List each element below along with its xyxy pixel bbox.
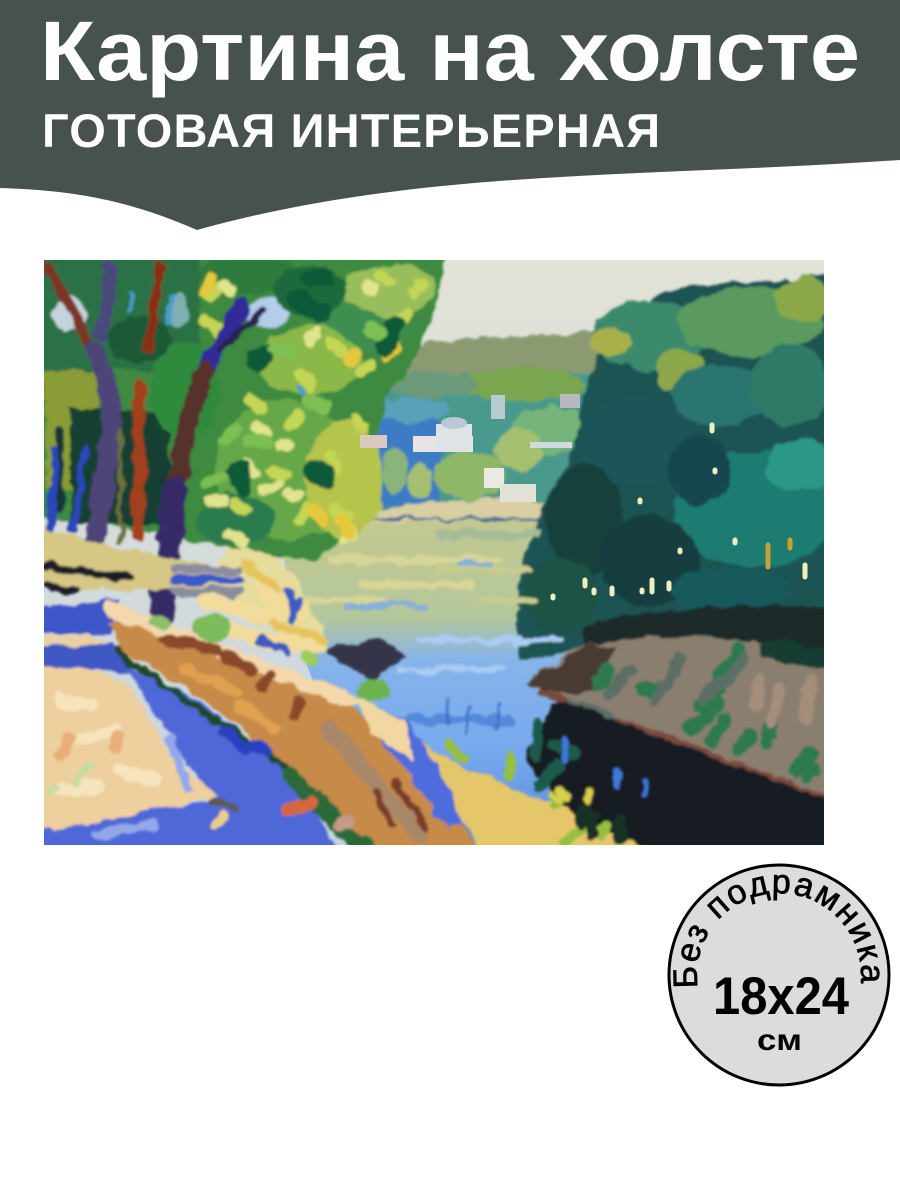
badge circle — [669, 865, 889, 1085]
title: Картина на холсте — [40, 4, 860, 98]
grass and ground above wall — [44, 526, 212, 594]
left dark woods — [20, 250, 435, 546]
bushes — [151, 614, 386, 702]
distant forest — [375, 364, 592, 512]
distant hill — [404, 328, 598, 378]
wall base green strip — [118, 652, 355, 850]
foliage dabs — [52, 275, 420, 543]
painting: river landscape — [44, 260, 824, 845]
slope above wall — [205, 565, 325, 652]
badge: canvas size — [668, 864, 890, 1086]
blue path shadow — [44, 668, 338, 845]
tree highlights — [553, 425, 805, 598]
badge curved label: Без подрамника — [673, 874, 880, 986]
dark shore — [325, 638, 408, 680]
right tree mass — [517, 270, 840, 660]
blue left shadows — [20, 600, 120, 635]
sky — [44, 260, 824, 845]
town buildings — [360, 394, 580, 502]
header banner — [0, 0, 900, 230]
right bank — [528, 636, 840, 805]
tree shadow band — [582, 603, 824, 650]
bank grass — [420, 740, 644, 845]
water — [284, 516, 571, 845]
subtitle: ГОТОВАЯ ИНТЕРЬЕРНАЯ — [42, 104, 660, 157]
left canopy base — [20, 240, 448, 559]
badge size: 18x24 — [713, 967, 849, 1026]
ground dark bands — [44, 566, 130, 588]
trunks — [48, 265, 262, 612]
badge unit: см — [757, 1024, 802, 1057]
far shore — [355, 496, 545, 524]
water strokes — [300, 535, 560, 735]
painted scene — [44, 260, 824, 845]
stone wall — [110, 610, 490, 860]
dark reflection — [524, 700, 824, 845]
cream path — [20, 667, 216, 835]
path debris — [95, 735, 350, 835]
